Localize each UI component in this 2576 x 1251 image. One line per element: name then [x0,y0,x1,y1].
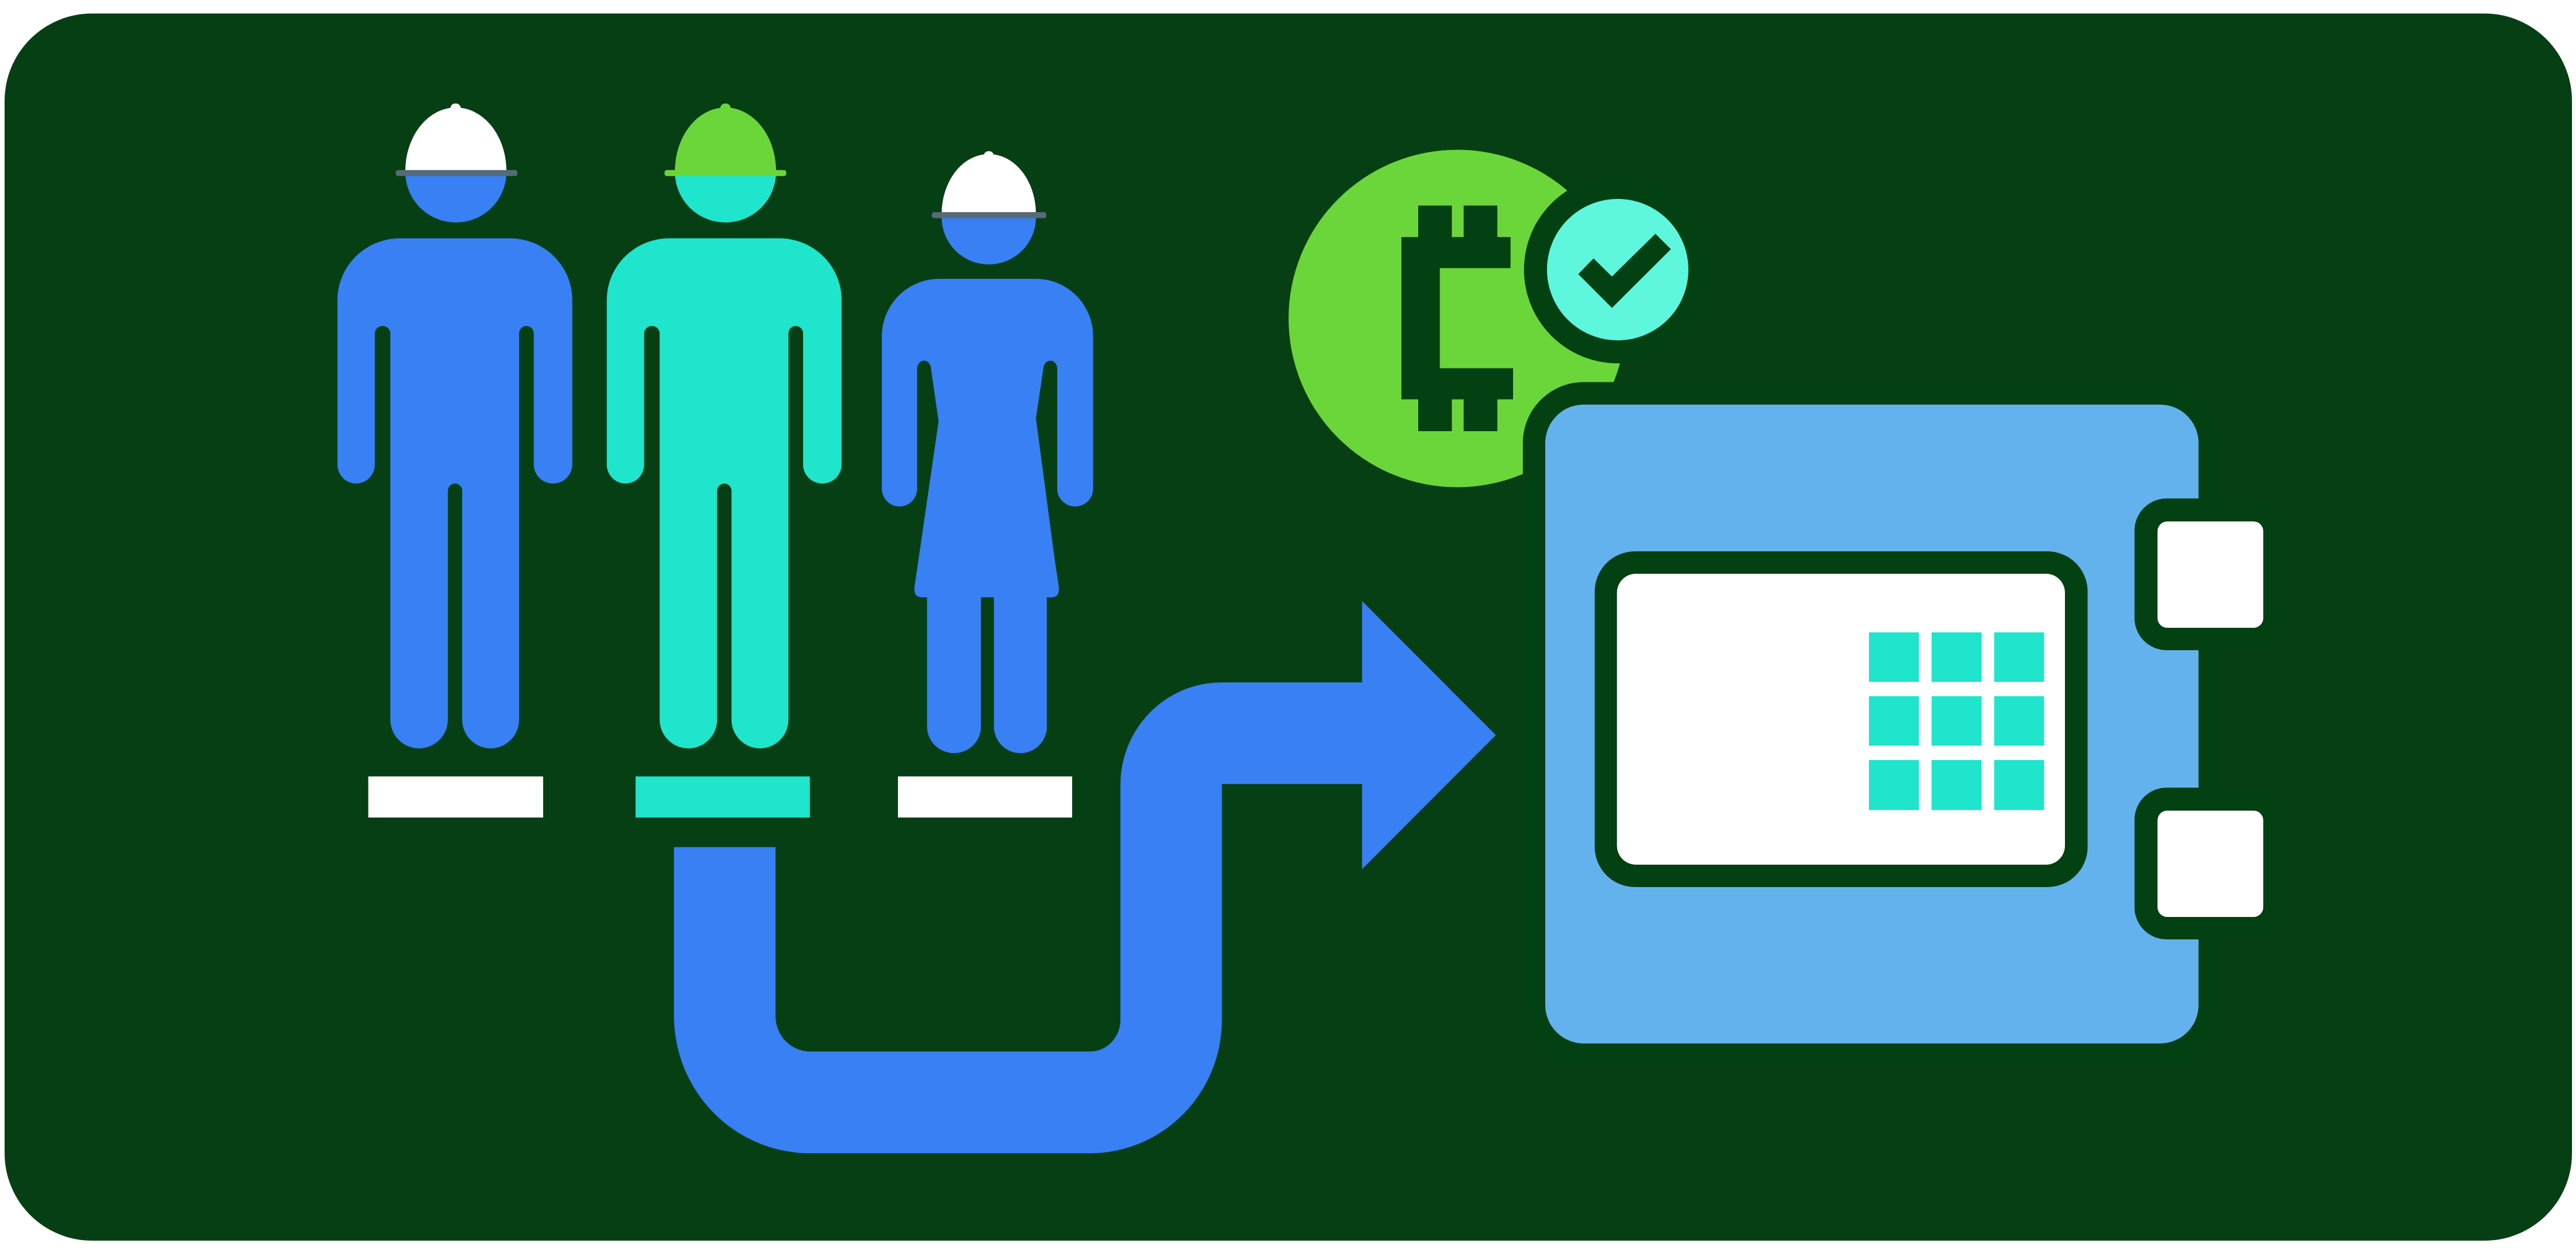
coin symbol [1402,206,1513,431]
label bar: white, first figure [368,776,543,818]
figure: female worker in blue with white hard hat [882,151,1093,753]
figure: male worker in teal with green hard hat [607,103,842,749]
hard hat: green [675,103,776,176]
keypad [1869,632,2044,810]
coin disc [1289,149,1626,488]
hat brim [396,170,517,176]
hat brim [932,212,1046,218]
label bar: white, third figure [898,776,1072,818]
upper hinge outline [2134,498,2286,650]
head [675,121,776,222]
arrow: blue flow from workers to vault [674,601,1496,1153]
body: female worker blue [882,279,1093,753]
hard hat: white [942,151,1036,214]
lower hinge outline [2134,788,2286,939]
badge cut-out ring [1524,176,1711,363]
vault outline [1523,382,2221,1066]
head [405,121,506,222]
icon: green bitcoin coin [1289,149,1626,488]
lower hinge [2157,811,2263,917]
icon: safe vault [1523,382,2286,1066]
body: male worker teal [607,238,842,749]
check mark [1578,234,1671,308]
body: male worker blue [337,238,573,749]
hard hat: white [405,103,506,171]
vault body [1545,405,2198,1043]
upper hinge [2157,521,2263,628]
icon: verified check badge [1524,176,1711,363]
label bar: teal, second figure [636,776,810,818]
head [942,170,1036,264]
door panel outline [1595,551,2088,887]
door panel [1617,574,2065,865]
badge disc [1547,199,1688,340]
figure: male worker in blue with white hard hat [337,103,573,749]
hat brim [665,170,786,176]
